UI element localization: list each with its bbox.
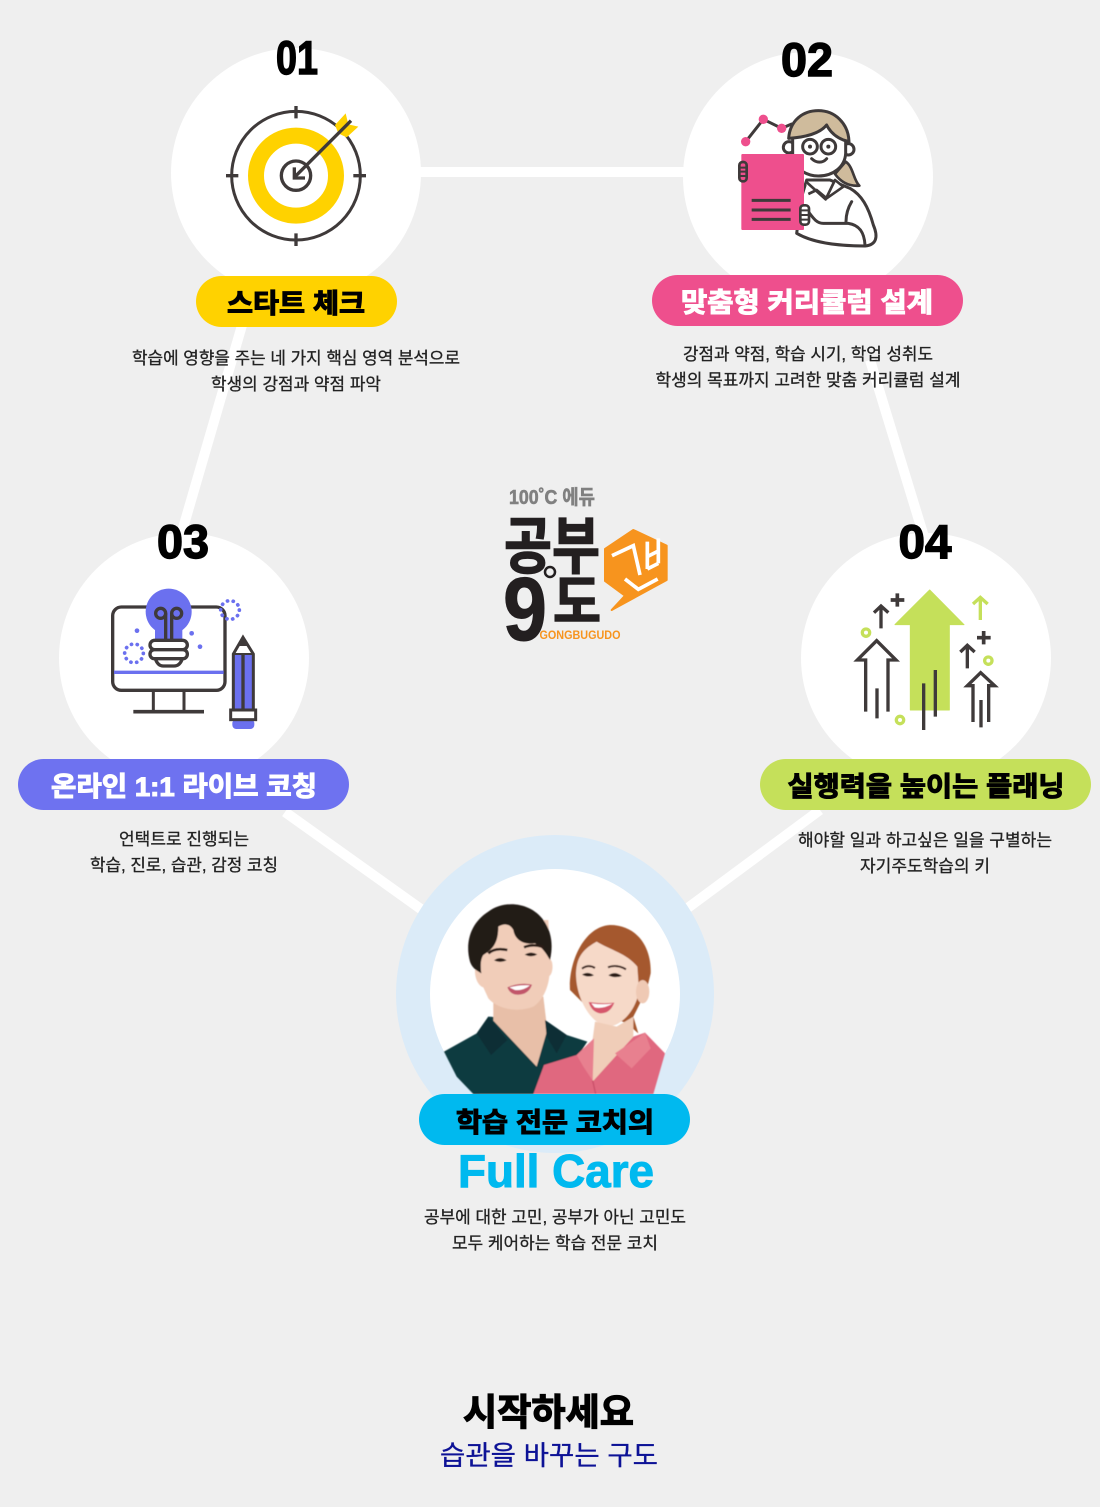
logo: wordmark xyxy=(503,513,601,660)
pill: online live coaching: 온라인 1:1 라이브 코칭 xyxy=(51,772,317,802)
text: step 01 description: 학생의 강점과 약점 파악 xyxy=(211,375,381,394)
number 03: 03 xyxy=(157,515,209,568)
subheading: how to change habits: 습관을 바꾸는 구도 xyxy=(440,1441,658,1471)
panel: step 01 start check xyxy=(132,31,460,394)
panel: expert coach full care xyxy=(396,835,714,1253)
icon: woman holding notebook xyxy=(739,111,876,246)
logo: 100C edu label: 100˚C 에듀 xyxy=(509,486,595,509)
text: step 04 description: 해야할 일과 하고싶은 일을 구별하는 xyxy=(798,831,1052,850)
panel: step 04 planning xyxy=(760,515,1091,876)
text: full care description xyxy=(424,1208,686,1253)
pill: expert coach: 학습 전문 코치의 xyxy=(456,1108,654,1138)
text: step 03 description: 언택트로 진행되는 xyxy=(119,830,249,849)
text: full care description: 모두 케어하는 학습 전문 코치 xyxy=(452,1234,658,1253)
text: step 01 description: 학습에 영향을 주는 네 가지 핵심 영역 분석으로 xyxy=(132,349,460,368)
ring around coaches photo xyxy=(396,835,714,1153)
logo: gongbugudo xyxy=(503,486,667,660)
logo: wordmark: 도 xyxy=(553,571,601,634)
number 02: 02 xyxy=(781,33,833,86)
logo: english name: GONGBUGUDO xyxy=(540,630,621,642)
logo: wordmark: 9 xyxy=(503,560,547,660)
panel: step 03 live coaching xyxy=(18,515,349,875)
pill: planning xyxy=(760,759,1091,810)
pill: custom curriculum xyxy=(652,275,963,326)
panel: step 02 custom curriculum xyxy=(652,33,963,390)
text: step 02 description: 학생의 목표까지 고려한 맞춤 커리큘럼 설계 xyxy=(656,371,960,390)
text: step 04 description: 자기주도학습의 키 xyxy=(860,857,990,876)
pill: start check xyxy=(196,276,397,327)
icon: target with arrow xyxy=(226,106,366,246)
text: step 03 description xyxy=(90,830,278,875)
number 01: 01 xyxy=(276,31,318,84)
icon: growth arrows xyxy=(857,590,995,730)
photo: two coaches xyxy=(444,904,665,1094)
logo: orange hexagon badge xyxy=(605,530,667,610)
logo: wordmark: 공부 xyxy=(504,513,600,582)
heading: start now: 시작하세요 xyxy=(463,1392,634,1433)
heading: Full Care: Full Care xyxy=(458,1145,654,1197)
pill: start check: 스타트 체크 xyxy=(227,289,365,319)
pill: custom curriculum: 맞춤형 커리큘럼 설계 xyxy=(681,288,933,318)
icon: monitor with light bulb and pencil xyxy=(113,589,256,729)
number 04: 04 xyxy=(898,515,952,568)
connector lines xyxy=(181,172,925,912)
pill: planning: 실행력을 높이는 플래닝 xyxy=(788,772,1064,802)
text: step 03 description: 학습, 진로, 습관, 감정 코칭 xyxy=(90,856,278,875)
text: step 01 description xyxy=(132,349,460,394)
text: step 04 description xyxy=(798,831,1052,876)
text: full care description: 공부에 대한 고민, 공부가 아닌 고민도 xyxy=(424,1208,686,1227)
text: step 02 description xyxy=(656,345,960,390)
pill: expert coach xyxy=(419,1094,690,1145)
pill: online live coaching xyxy=(18,759,349,810)
text: step 02 description: 강점과 약점, 학습 시기, 학업 성취도 xyxy=(683,345,933,364)
